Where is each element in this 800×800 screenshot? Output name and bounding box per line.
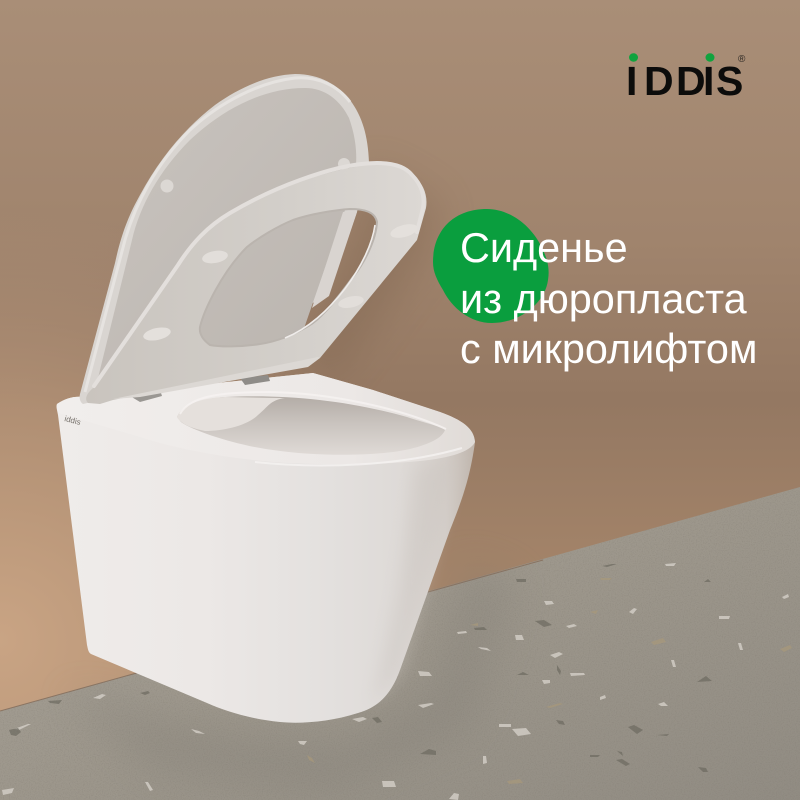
bowl opening — [177, 396, 445, 455]
seat bumper lower left — [142, 325, 172, 343]
headline text: Сиденье — [460, 225, 628, 271]
rim highlight — [255, 448, 462, 465]
lid inner panel — [97, 88, 356, 382]
hinges — [130, 375, 270, 402]
floor shadow under toilet — [60, 560, 520, 790]
lid rim — [80, 74, 369, 404]
rim opening sheen — [180, 392, 446, 429]
seat inner ring shadow — [200, 209, 377, 346]
lid bump right — [338, 158, 350, 170]
lid inner highlight — [85, 78, 350, 392]
lid right band — [312, 212, 357, 308]
toilet body — [57, 373, 475, 723]
top rim of toilet — [57, 373, 475, 464]
seat outer shape — [86, 164, 426, 404]
headline text: с микролифтом — [460, 326, 757, 372]
seat hole lower sheen — [285, 225, 375, 338]
shadow of seat on wall — [300, 165, 440, 380]
headline text — [460, 225, 757, 372]
small logo on toilet: iddis — [64, 414, 82, 427]
toilet lid — [80, 74, 369, 404]
tan floor chips — [307, 578, 792, 784]
dark floor chips — [9, 564, 712, 772]
seat front edge — [113, 357, 320, 399]
lid bump left — [160, 180, 174, 192]
IDDIS logo: IDDIS — [626, 58, 743, 104]
logo green dots — [629, 53, 714, 62]
toilet seat — [86, 163, 426, 404]
seat bumper upper left — [201, 249, 229, 265]
registered mark: ® — [738, 54, 746, 65]
green circle accent — [433, 209, 549, 323]
terrazzo floor — [0, 487, 800, 800]
seat bumper lower right — [337, 294, 365, 310]
bowl tongue — [177, 397, 285, 431]
body soft shading — [372, 450, 462, 705]
seat bumper upper right — [389, 222, 419, 240]
light floor chips — [2, 563, 789, 800]
seat top edge — [94, 163, 424, 386]
toilet — [57, 373, 475, 723]
headline text: из дюропласта — [460, 276, 748, 322]
